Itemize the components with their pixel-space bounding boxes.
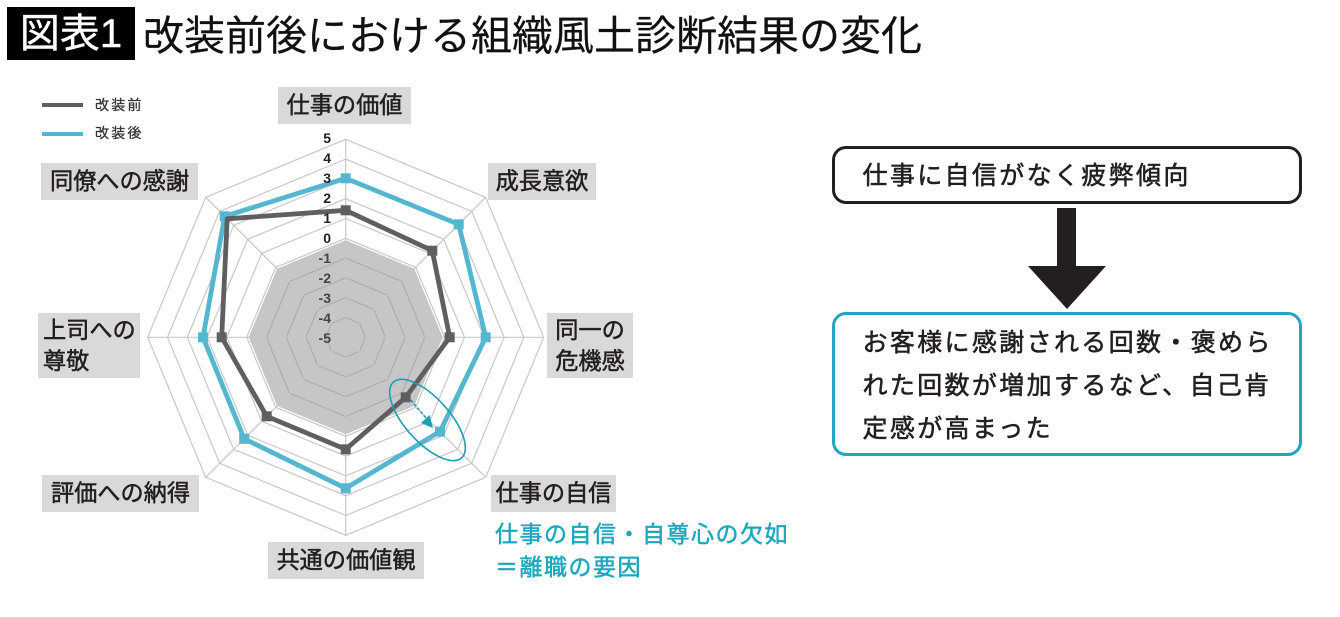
legend line: after <box>42 132 83 136</box>
axis scale labels: -4 <box>319 310 331 326</box>
axis scale labels <box>319 130 331 346</box>
callout: after: れた回数が増加するなど、自己肯 <box>862 372 1272 400</box>
axis scale labels: 4 <box>323 150 331 166</box>
axis scale labels: -2 <box>319 270 331 286</box>
series: after renovation <box>198 173 491 493</box>
axis scale labels: -1 <box>319 250 331 266</box>
highlight ellipse <box>377 367 478 473</box>
callout: after: 定感が高まった <box>862 414 1053 442</box>
axis label: 同一の危機感: 同一の <box>555 317 625 343</box>
axis label: 上司への尊敬: 上司への <box>43 317 136 343</box>
title badge: 図表1 <box>20 12 122 56</box>
legend line: before <box>42 103 83 107</box>
axis scale labels: 3 <box>323 170 331 186</box>
axis label: 仕事の価値: 仕事の価値 <box>287 92 402 118</box>
radar grid <box>148 139 544 535</box>
axis label: 仕事の自信: 仕事の自信 <box>496 480 611 506</box>
axis scale labels: 5 <box>323 130 331 146</box>
axis label: 共通の価値観: 共通の価値観 <box>276 547 416 573</box>
axis scale labels: 0 <box>323 230 331 246</box>
callout: after: お客様に感謝される回数・褒めら <box>862 328 1273 356</box>
dashed change arrow <box>411 400 433 428</box>
axis label: 評価への納得 <box>42 475 199 512</box>
axis label: 上司への尊敬: 尊敬 <box>43 348 89 374</box>
axis label: 評価への納得: 評価への納得 <box>51 480 190 506</box>
teal annotation: 仕事の自信・自尊心の欠如 <box>495 521 789 547</box>
axis label: 成長意欲: 成長意欲 <box>496 168 588 194</box>
axis label: 仕事の価値 <box>278 87 411 124</box>
legend <box>42 97 144 141</box>
callout: after <box>832 312 1302 456</box>
axis label: 成長意欲 <box>488 163 596 200</box>
legend label: before: 改装前 <box>95 97 144 113</box>
series: before renovation <box>217 205 455 454</box>
callout: before <box>832 146 1302 204</box>
axis scale labels: -3 <box>319 290 331 306</box>
title: 改装前後における組織風土診断結果の変化 <box>143 13 922 59</box>
axis label: 仕事の自信 <box>491 475 616 512</box>
axis label: 上司への尊敬 <box>38 313 140 378</box>
axis label: 同僚への感謝 <box>41 163 198 200</box>
axis label: 同一の危機感: 危機感 <box>555 348 625 374</box>
axis label: 同一の危機感 <box>547 313 633 378</box>
negative area fill <box>249 240 443 434</box>
title badge <box>7 7 135 60</box>
legend label: after: 改装後 <box>95 125 144 141</box>
axis scale labels: -5 <box>319 330 331 346</box>
axis scale labels: 2 <box>323 190 331 206</box>
axis label: 同僚への感謝: 同僚への感謝 <box>50 168 189 194</box>
teal annotation <box>495 521 789 580</box>
axis scale labels: 1 <box>323 210 331 226</box>
axis label: 共通の価値観 <box>268 542 424 579</box>
callout: before: 仕事に自信がなく疲弊傾向 <box>862 162 1191 190</box>
teal annotation: ＝離職の要因 <box>495 554 642 580</box>
